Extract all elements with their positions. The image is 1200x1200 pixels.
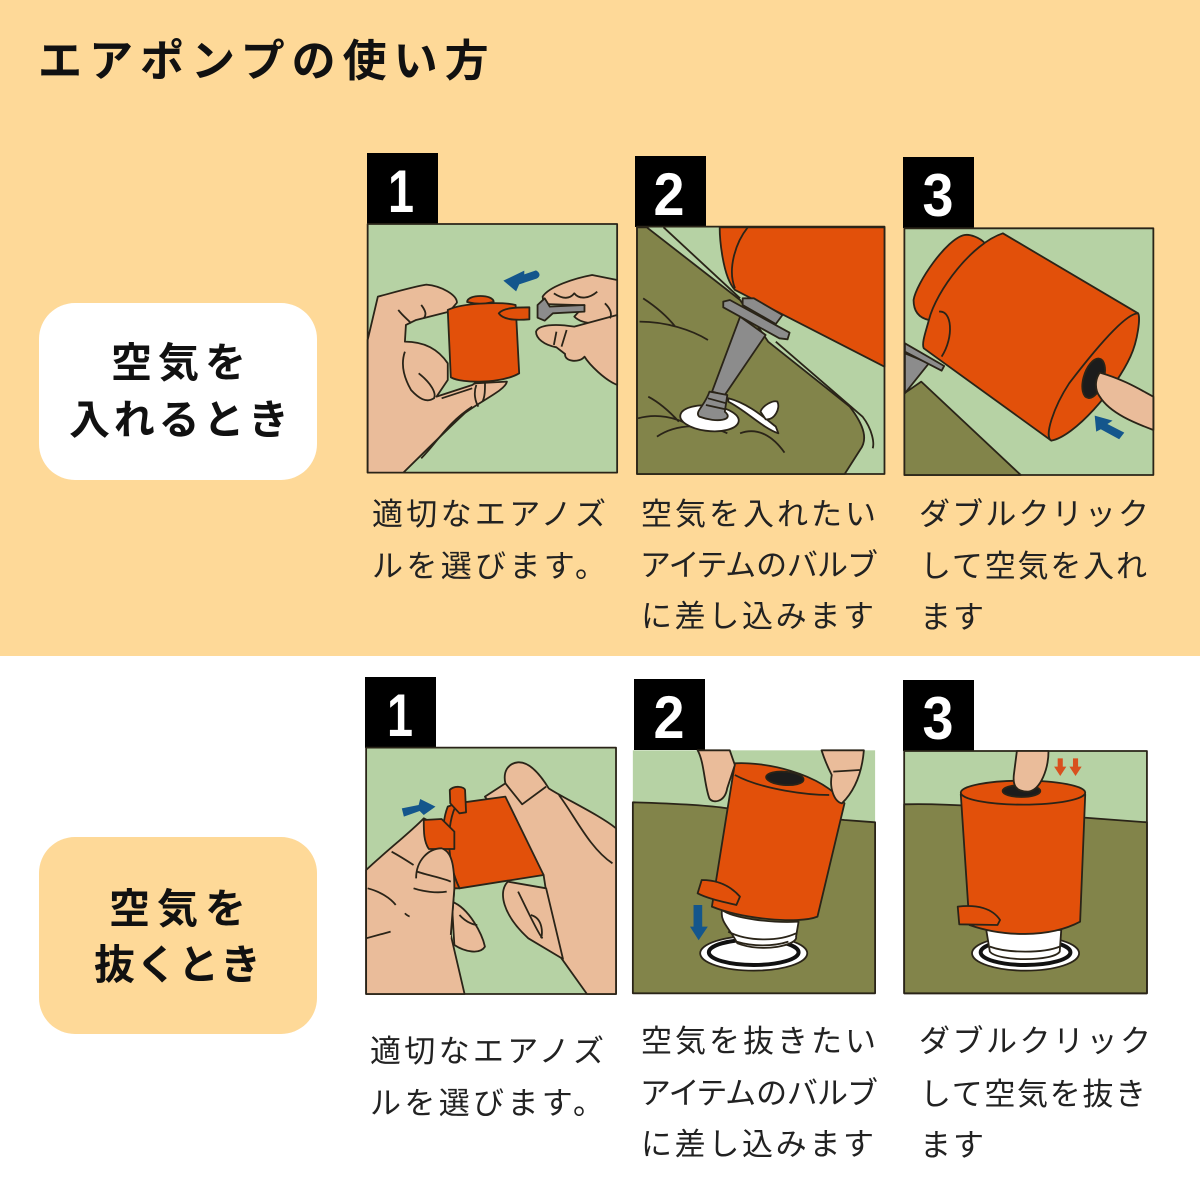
- step text: inflate 2: に差し込みます: [641, 599, 874, 634]
- step text: inflate 1: ルを選びます。: [372, 549, 606, 584]
- step text: inflate 3: [919, 497, 1149, 635]
- step text: inflate 3: ダブルクリック: [919, 497, 1149, 532]
- panel: deflate step 3: [904, 751, 1147, 993]
- number badge: deflate 2: 2: [654, 684, 684, 751]
- step text: deflate 1: 適切なエアノズ: [370, 1034, 604, 1069]
- step text: deflate 3: して空気を抜き: [920, 1077, 1146, 1112]
- step text: deflate 3: [919, 1024, 1151, 1163]
- panel: deflate step 1: [366, 748, 616, 994]
- number badge: deflate 3: [903, 680, 974, 752]
- label: inflate: [39, 303, 317, 480]
- step text: deflate 1: ルを選びます。: [370, 1086, 604, 1121]
- number badge: inflate 1: 1: [388, 158, 414, 225]
- panel: deflate step 2: [633, 750, 875, 993]
- number badge: inflate 2: [635, 156, 706, 228]
- step text: deflate 2: [641, 1024, 877, 1162]
- number badge: deflate 1: [365, 677, 436, 749]
- label: deflate: [39, 837, 317, 1034]
- step text: inflate 3: して空気を入れ: [920, 549, 1147, 584]
- number badge: deflate 2: [634, 679, 705, 751]
- step text: deflate 1: [370, 1034, 604, 1121]
- label: deflate: 空気を: [109, 886, 246, 932]
- step text: inflate 2: アイテムのバルブ: [641, 548, 877, 583]
- step text: deflate 2: アイテムのバルブ: [641, 1076, 877, 1111]
- number badge: deflate 3: 3: [922, 685, 954, 752]
- step text: inflate 1: [372, 497, 606, 584]
- step text: deflate 2: に差し込みます: [641, 1127, 874, 1162]
- panel: inflate step 2: [637, 227, 884, 474]
- step text: inflate 3: ます: [920, 600, 984, 635]
- label: inflate: 入れるとき: [69, 397, 289, 443]
- label: inflate: 空気を: [111, 340, 246, 386]
- label: deflate: 抜くとき: [94, 942, 261, 988]
- panel: inflate step 3: [904, 228, 1153, 475]
- number badge: deflate 1: 1: [387, 682, 413, 749]
- number badge: inflate 2: 2: [654, 161, 684, 228]
- step text: deflate 3: ダブルクリック: [919, 1024, 1151, 1059]
- title: エアポンプの使い方: [38, 37, 496, 86]
- number badge: inflate 3: 3: [922, 162, 954, 229]
- panel: inflate step 1: [368, 224, 617, 473]
- step text: inflate 1: 適切なエアノズ: [372, 497, 606, 532]
- step text: inflate 2: [641, 497, 877, 634]
- step text: inflate 2: 空気を入れたい: [641, 497, 876, 532]
- step text: deflate 2: 空気を抜きたい: [641, 1024, 876, 1059]
- step text: deflate 3: ます: [920, 1128, 984, 1163]
- number badge: inflate 1: [367, 153, 438, 225]
- number badge: inflate 3: [903, 157, 974, 229]
